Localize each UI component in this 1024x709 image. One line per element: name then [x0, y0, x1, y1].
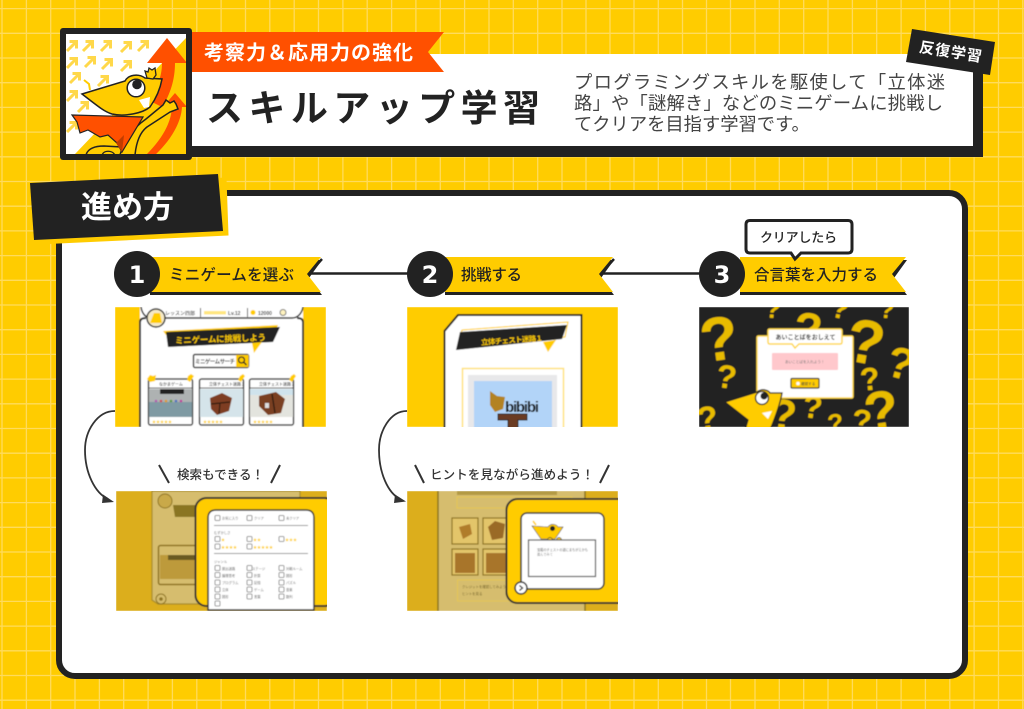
question mark pattern: ?	[828, 292, 852, 326]
question mark pattern: ?	[826, 407, 844, 439]
filter labels: 音楽	[286, 587, 293, 592]
game card 2: 立体チェスト迷路１	[209, 380, 245, 386]
screenshot: hint popup	[407, 491, 636, 611]
question mark pattern: ?	[860, 377, 903, 444]
step 1 header: ミニゲームを選ぶ	[169, 266, 294, 284]
filter labels: 記憶	[254, 580, 261, 585]
screenshot: maze challenge	[407, 307, 618, 438]
hint text box	[528, 540, 596, 576]
step 1 header	[114, 251, 322, 297]
subject ribbon	[192, 32, 444, 72]
screenshot: mini game list: 12000	[258, 311, 272, 317]
icon: mascot with rising arrows	[60, 28, 192, 160]
title banner: ミニゲームに挑戦しよう	[175, 332, 266, 346]
curved arrow: step 2 to hint	[379, 411, 407, 503]
screenshot: search filter popup	[116, 491, 336, 611]
description: 路」や「謎解き」などのミニゲームに挑戦し	[574, 92, 943, 114]
step 2 header: 2	[422, 261, 438, 289]
hint mascot	[532, 521, 563, 542]
step 3 header: 合言葉を入力する	[754, 266, 878, 284]
description: てクリアを目指す学習です。	[574, 114, 810, 134]
subject ribbon: 考察力＆応用力の強化	[204, 42, 413, 64]
game card 1: なかまゲーム	[159, 380, 183, 386]
description: プログラミングスキルを駆使して「立体迷	[574, 72, 945, 92]
difficulty stars: ★★★★	[221, 544, 237, 550]
filter labels: 図形	[286, 573, 293, 578]
search box: ミニゲームサーチ	[195, 358, 235, 366]
filter labels: むずかしさ	[214, 530, 230, 535]
callout: クリアしたら	[746, 220, 852, 259]
difficulty stars: ★★	[253, 537, 261, 542]
question mark pattern	[699, 307, 909, 427]
filter labels: 脱出迷路	[222, 566, 236, 571]
title banner: 立体チェスト迷路１	[481, 333, 543, 347]
panel: 進め方	[30, 174, 965, 676]
step 3 header: 3	[714, 261, 730, 289]
filter labels: ステージ	[252, 566, 266, 571]
question mark pattern: ?	[792, 302, 825, 356]
filter labels: 対戦ルーム	[286, 566, 303, 571]
heading: 進め方: 進め方	[81, 190, 174, 225]
difficulty stars: ★★★★★	[253, 544, 273, 550]
filter labels: お気に入り	[222, 516, 238, 520]
game card 2: ★★★★★	[203, 419, 223, 424]
filter labels: 数列	[286, 594, 293, 599]
callout: 検索もできる	[159, 465, 280, 483]
connector lines between steps	[309, 259, 702, 274]
callout: 検索もできる: 検索もできる！	[177, 467, 264, 482]
filter labels: パズル	[286, 580, 297, 585]
thumbnails	[452, 518, 509, 575]
question mark pattern: ?	[695, 399, 720, 439]
game card 3: ★★★★★	[253, 419, 273, 424]
step 3 header	[699, 251, 907, 297]
heading: 進め方	[30, 174, 228, 244]
game preview	[461, 367, 565, 427]
question mark pattern: ?	[714, 357, 739, 396]
tag: 反復学習: 反復学習	[918, 38, 983, 66]
question mark pattern: ?	[764, 293, 782, 325]
tag: 反復学習	[906, 29, 995, 75]
question mark pattern: ?	[696, 303, 743, 376]
hint popup	[506, 499, 636, 603]
avatar	[147, 309, 165, 327]
filter labels: クリア	[254, 516, 265, 520]
filter labels: 図形	[222, 594, 229, 599]
screenshot: hint popup: クレジットを確認してみよう	[462, 584, 506, 589]
question mark pattern: ?	[851, 402, 873, 440]
callout: ヒントを見ながら進めよう	[415, 465, 609, 483]
question mark pattern: ?	[881, 337, 920, 391]
next button	[515, 582, 527, 594]
curved arrow: step 1 to search	[85, 411, 115, 503]
dialog: あいことばを入れよう！	[785, 359, 825, 364]
difficulty stars	[221, 537, 297, 550]
filter labels: ジャンル	[214, 560, 228, 564]
filter labels: ゲーム	[254, 587, 264, 592]
screenshot: password entry	[699, 307, 909, 427]
difficulty stars: ★	[221, 537, 225, 542]
filter checkboxes	[215, 516, 284, 606]
header panel	[192, 29, 995, 157]
game card 2	[199, 374, 245, 425]
filter labels: 未クリア	[286, 516, 300, 520]
callout: ヒントを見ながら進めよう: ヒントを見ながら進めよう！	[430, 467, 594, 482]
question mark pattern: ?	[878, 296, 895, 325]
mascot	[725, 390, 782, 430]
question mark pattern: ?	[800, 388, 825, 426]
dialog: あいことばをおしえて	[776, 334, 836, 342]
filter labels: 言葉	[254, 594, 261, 599]
question mark pattern: ?	[858, 360, 881, 398]
search box	[194, 354, 248, 368]
screenshot: mini game list: Lv.12	[228, 311, 241, 317]
dialog: 確認する	[801, 381, 816, 386]
game preview: bibibi	[505, 399, 539, 416]
step 2 header: 挑戦する	[461, 266, 522, 284]
difficulty stars: ★★★	[285, 537, 297, 542]
game card 1	[147, 374, 194, 425]
title banner	[456, 322, 568, 352]
filter labels: 立体	[222, 587, 229, 592]
description	[574, 72, 945, 134]
screenshot: mini game list: レッスン四郎	[165, 310, 195, 317]
step 1 header: 1	[129, 261, 145, 289]
game card 3	[249, 374, 296, 425]
filter popup	[196, 498, 336, 610]
title banner	[163, 325, 280, 353]
game card 1: ★★★★★	[152, 419, 172, 424]
step 2 header	[407, 251, 614, 297]
main title: スキルアップ学習	[206, 88, 540, 129]
screenshot: hint popup: ヒントを見る	[462, 591, 482, 596]
filter labels	[214, 516, 303, 599]
screenshot: mini game list	[115, 307, 326, 427]
question mark pattern: ?	[768, 390, 799, 441]
filter labels: プログラム	[222, 580, 239, 585]
hint text box: 進んでみて	[537, 552, 553, 556]
question mark pattern: ?	[841, 306, 890, 380]
filter labels: 論理思考	[222, 573, 236, 578]
callout: クリアしたら: クリアしたら	[760, 230, 837, 245]
game card 3: 立体チェスト迷路２	[259, 380, 295, 386]
filter labels: 計算	[254, 573, 261, 578]
dialog	[757, 329, 853, 398]
hint text box: 宝箱のチェストの道にまちがえかも	[537, 547, 588, 552]
